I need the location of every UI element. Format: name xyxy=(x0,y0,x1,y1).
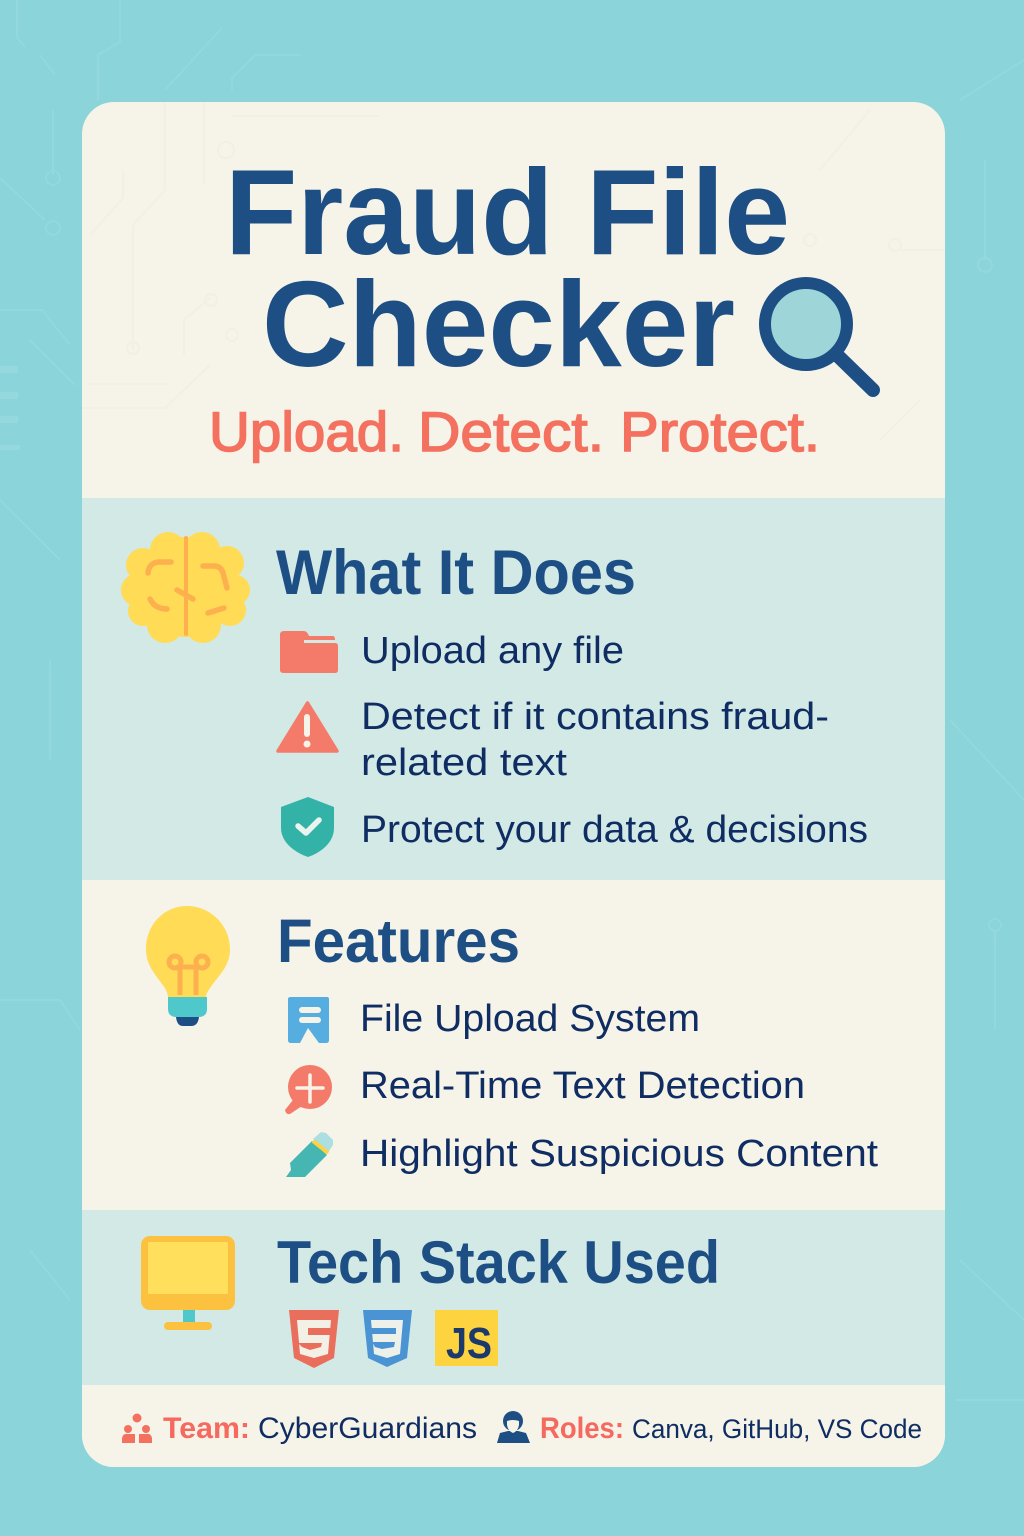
icon: plus bubble xyxy=(285,1065,332,1114)
icon: css3 xyxy=(363,1310,412,1367)
subtitle: Protect. xyxy=(620,400,820,463)
title: Checker xyxy=(262,256,735,392)
text: detect: Detect if it contains fraud- xyxy=(361,696,829,738)
icon: bookmark document xyxy=(288,997,329,1043)
panel: tech stack xyxy=(82,1210,945,1385)
icon: magnifying glass xyxy=(765,283,873,390)
title: Fraud File xyxy=(225,144,790,280)
panel: card xyxy=(82,102,945,1467)
icon: person xyxy=(497,1411,530,1443)
icon: highlighter xyxy=(286,1132,333,1177)
footer: roles xyxy=(497,1411,922,1445)
subtitle: Upload. xyxy=(209,400,404,463)
panel: footer xyxy=(82,1436,945,1467)
icon: brain xyxy=(121,532,250,643)
footer: team: Team: xyxy=(163,1412,250,1445)
text: upload any file: Upload any file xyxy=(361,630,624,672)
subtitle: Detect. xyxy=(418,400,604,463)
text: highlight: Highlight Suspicious Content xyxy=(360,1133,878,1175)
icon: shield xyxy=(281,797,334,857)
footer: team: CyberGuardians xyxy=(258,1412,477,1445)
subtitle xyxy=(209,400,820,463)
footer: team xyxy=(122,1412,477,1445)
icon: javascript: JS xyxy=(446,1319,492,1368)
footer: roles: Roles: xyxy=(540,1412,624,1445)
panel: features xyxy=(82,880,945,1210)
text: file upload system: File Upload System xyxy=(360,998,700,1040)
icon: html5 xyxy=(289,1310,339,1368)
icon: team xyxy=(122,1414,152,1443)
footer: roles: Canva, GitHub, VS Code xyxy=(632,1414,922,1444)
text: real-time: Real-Time Text Detection xyxy=(360,1065,805,1107)
text: detect: related text xyxy=(361,742,567,784)
heading: features: Features xyxy=(277,907,520,975)
text: detect xyxy=(361,696,829,784)
panel: what it does xyxy=(82,498,945,880)
icon: warning triangle xyxy=(278,703,337,751)
text: protect: Protect your data & decisions xyxy=(361,809,868,851)
heading: tech stack: Tech Stack Used xyxy=(277,1229,720,1296)
icon: folder xyxy=(280,631,338,673)
title xyxy=(225,144,790,392)
icon: light bulb xyxy=(146,906,230,1026)
icon: monitor xyxy=(141,1236,235,1330)
icon: javascript xyxy=(435,1310,498,1368)
heading: what it does: What It Does xyxy=(276,538,636,608)
